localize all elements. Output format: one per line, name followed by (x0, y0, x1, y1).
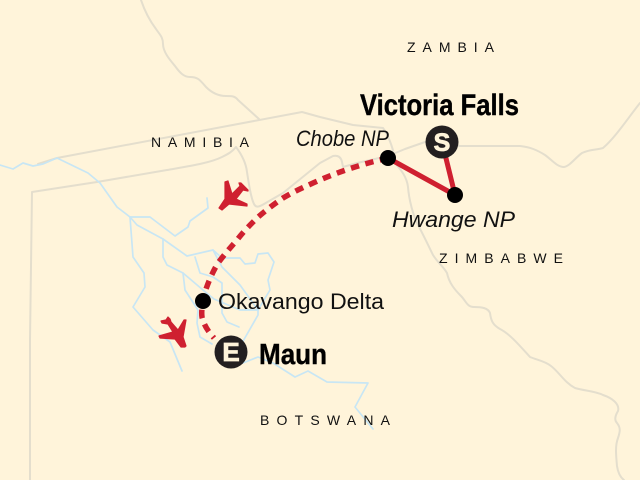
stop: Chobe NP (380, 150, 396, 166)
overland route: solid line (388, 142, 455, 195)
stop: Okavango Delta (195, 293, 211, 309)
label: Zimbabwe: ZIMBABWE (439, 250, 563, 266)
label: Namibia: NAMIBIA (151, 134, 250, 150)
label: Zambia: ZAMBIA (407, 39, 495, 55)
label: Botswana: BOTSWANA (260, 412, 391, 428)
label: Chobe NP: Chobe NP (296, 126, 389, 151)
stop: Hwange NP (447, 187, 463, 203)
start marker: S (426, 126, 458, 158)
end marker: E: E (222, 337, 240, 367)
label: Maun: Maun (259, 339, 327, 371)
label: Okavango Delta: Okavango Delta (218, 289, 385, 314)
icon: plane south (159, 317, 186, 347)
label: Victoria Falls: Victoria Falls (360, 89, 519, 122)
flight route: dotted line (202, 158, 388, 338)
label: Hwange NP: Hwange NP (392, 207, 515, 232)
rivers (0, 158, 373, 429)
icon: plane north (219, 181, 248, 210)
start marker: S: S (434, 129, 450, 157)
end marker: E (214, 336, 248, 368)
